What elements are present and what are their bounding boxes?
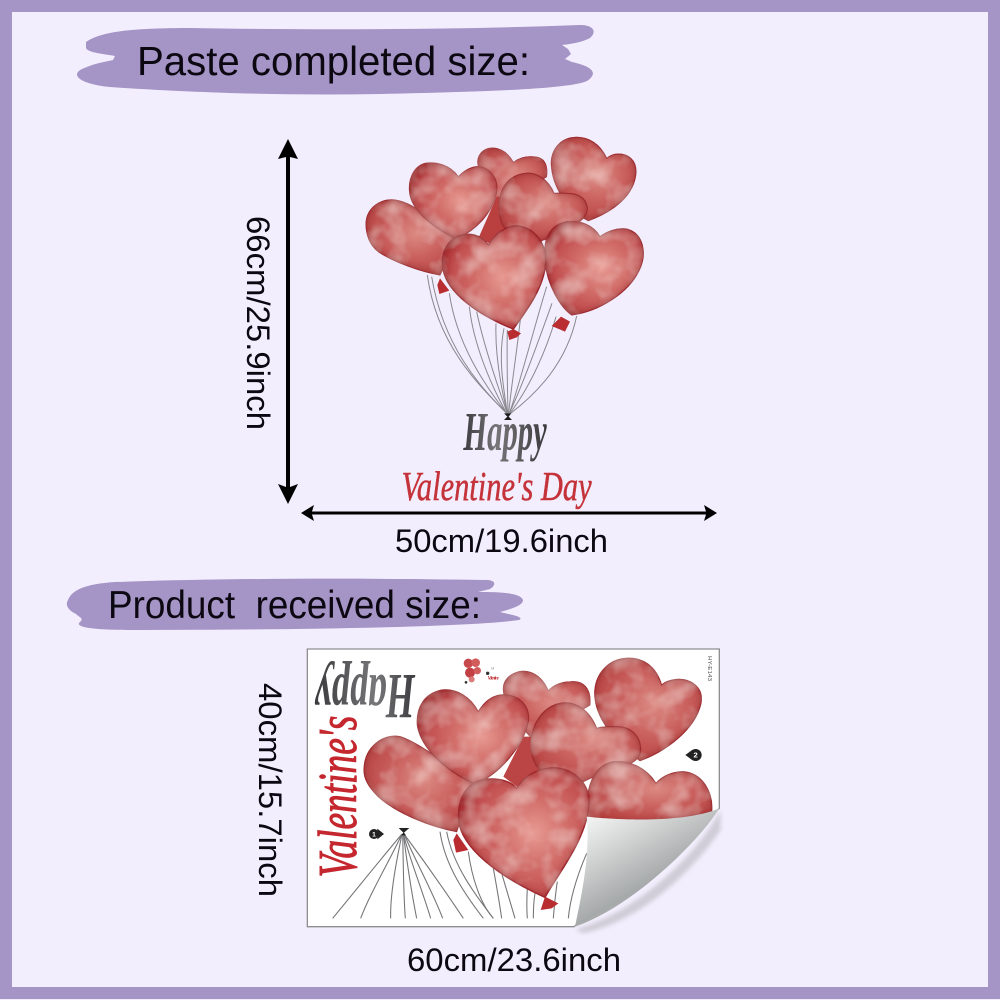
curled corner xyxy=(575,808,719,927)
vertical dimension arrow xyxy=(278,139,298,504)
sheet strings xyxy=(333,832,587,918)
balloon: centre xyxy=(531,703,641,782)
balloon: front centre xyxy=(442,226,546,329)
lettering: Happy, upside down: Happy xyxy=(314,660,416,732)
heading text: Product received size: xyxy=(108,584,481,627)
balloon: top right xyxy=(551,137,636,221)
lettering: Happy: Happy xyxy=(463,401,547,462)
balloon: far left xyxy=(366,200,457,275)
mini balloon sticker: H xyxy=(491,665,494,670)
marker 1: 1 xyxy=(372,831,376,838)
balloon: upper left xyxy=(409,163,497,238)
balloon: back middle sliver xyxy=(503,737,577,787)
mini balloon sticker: Valentine xyxy=(488,676,499,681)
fold shadow xyxy=(575,810,721,933)
balloon: far left xyxy=(364,736,473,832)
balloon: back top xyxy=(478,148,547,210)
horizontal dimension arrow xyxy=(301,505,717,521)
balloon: top right xyxy=(595,658,701,761)
lettering: Valentine's Day: Valentine's Day xyxy=(402,464,592,510)
heading text: Paste completed size: xyxy=(137,38,530,84)
balloon: centre xyxy=(499,173,587,242)
sticker sheet with peeled corner xyxy=(307,649,721,933)
mini balloon sticker xyxy=(464,658,499,684)
white sheet xyxy=(307,649,719,927)
knot xyxy=(504,413,512,420)
balloon necks xyxy=(437,278,570,340)
balloon: back top xyxy=(503,671,590,740)
height label: received sheet: 40cm/15.7inch xyxy=(252,683,288,897)
balloon: lower right, clipped by fold xyxy=(587,761,712,822)
width label: 50cm/19.6inch xyxy=(395,523,608,559)
marker 1 xyxy=(369,829,384,839)
balloon: back middle sliver xyxy=(478,197,547,245)
illustration: heart balloon bouquet xyxy=(366,137,643,510)
lettering: Valentine's, sideways: Valentine's xyxy=(307,716,368,877)
balloon necks xyxy=(453,833,558,910)
marker 2: 2 xyxy=(694,751,698,760)
heading banner: paste completed size xyxy=(77,25,594,95)
balloon: front centre xyxy=(459,768,589,897)
heading banner: product received size xyxy=(67,579,523,630)
balloon strings xyxy=(427,275,577,413)
balloon: upper left xyxy=(417,690,529,784)
width label: received sheet: 60cm/23.6inch xyxy=(407,942,621,978)
marker 2 xyxy=(685,749,702,761)
purple brush stroke xyxy=(67,579,523,630)
product code: HY-E143 xyxy=(706,656,712,681)
height label: 66cm/25.9inch xyxy=(240,216,276,430)
purple brush stroke xyxy=(77,25,594,95)
sticker knot xyxy=(399,828,409,835)
balloon: right xyxy=(545,221,643,315)
